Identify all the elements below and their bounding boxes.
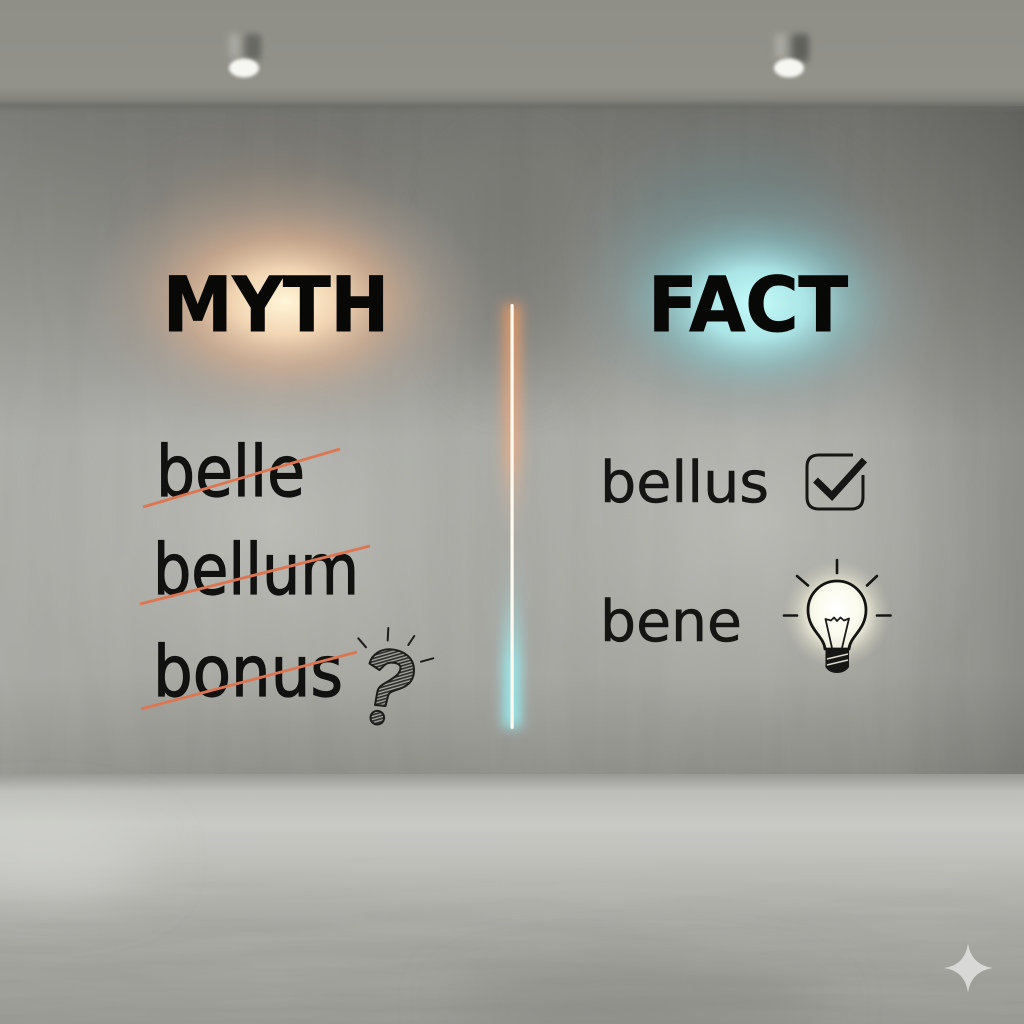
spotlight right: [774, 34, 809, 78]
heading: FACT: FACT: [648, 261, 848, 349]
fact list: [600, 450, 769, 655]
background: concrete wall: [0, 103, 1024, 774]
myth: belle: belle: [156, 431, 305, 513]
background: ceiling: [0, 0, 1024, 108]
myth: bonus: bonus: [153, 631, 343, 713]
icon: sparkle watermark: [944, 943, 993, 993]
myth list: [140, 431, 370, 713]
background: floor: [0, 774, 1024, 1024]
icon: sketched question mark: [358, 628, 433, 724]
glow behind MYTH: [80, 170, 490, 432]
glow behind FACT: [565, 155, 945, 429]
fact: bene: bene: [600, 589, 742, 655]
icon: glowing light bulb: [783, 560, 891, 673]
myth: bellum: bellum: [153, 529, 359, 611]
neon divider: [503, 304, 521, 729]
fact: bellus: bellus: [600, 450, 769, 516]
icon: checkbox: [807, 455, 864, 509]
heading: MYTH: MYTH: [163, 261, 389, 349]
spotlight left: [229, 34, 261, 78]
